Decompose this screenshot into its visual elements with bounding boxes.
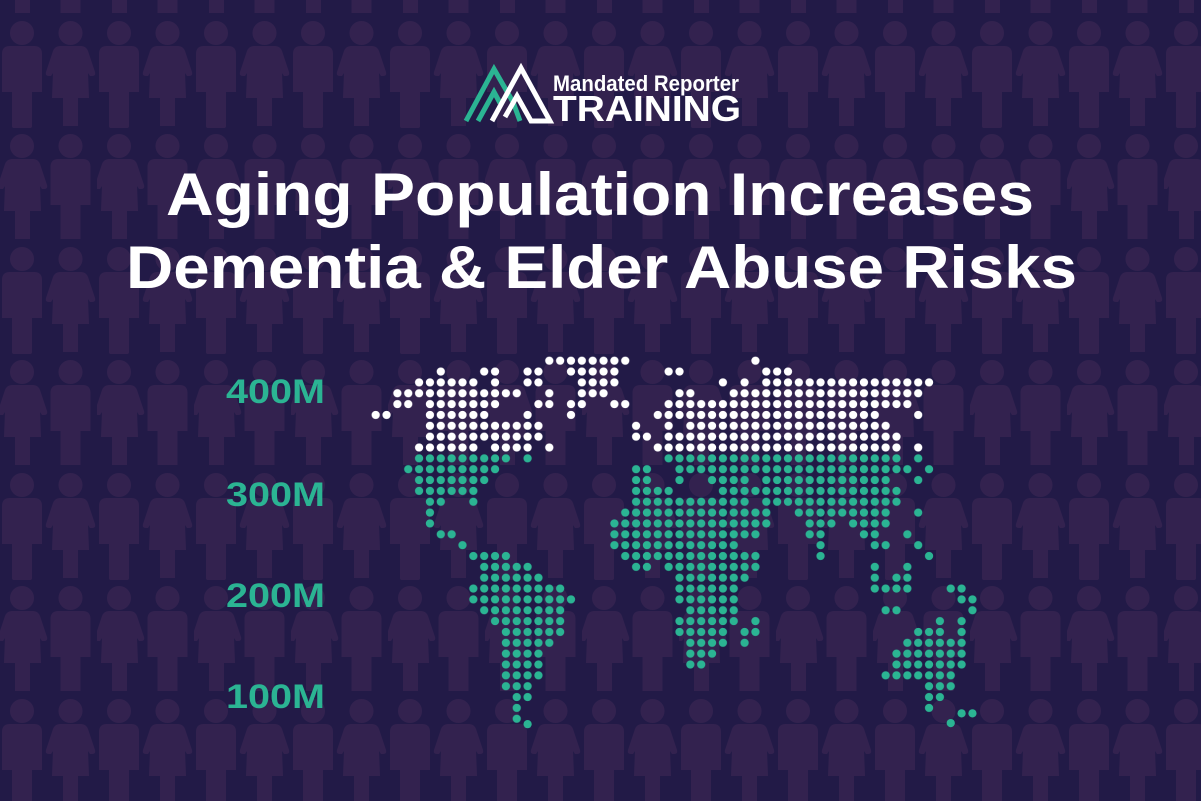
- logo: [466, 68, 741, 129]
- axis labels: [226, 373, 325, 716]
- axis labels: 100M: [226, 678, 325, 716]
- title: Dementia & Elder Abuse Risks: [126, 234, 1077, 301]
- axis labels: 200M: [226, 577, 325, 615]
- axis labels: 300M: [226, 476, 325, 514]
- icon: mountain logo: [466, 68, 550, 121]
- axis labels: 400M: [226, 373, 325, 411]
- title: Aging Population Increases: [166, 161, 1034, 228]
- title: [126, 161, 1077, 301]
- logo text: Mandated Reporter: [553, 71, 739, 96]
- logo: TRAINING: [553, 88, 741, 129]
- dotted world map: [370, 355, 978, 728]
